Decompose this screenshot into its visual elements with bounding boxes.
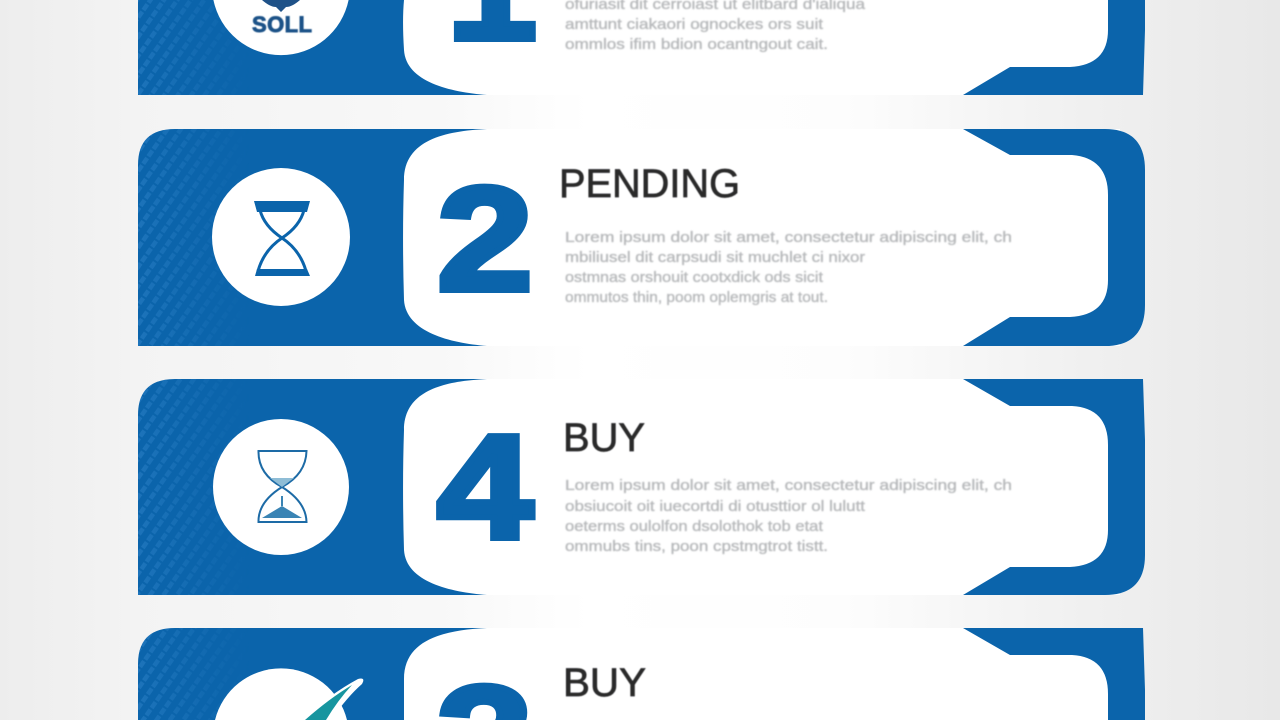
step number 2: 2 bbox=[437, 157, 533, 322]
description text 4: ommubs tins, poon cpstmgtrot tistt. bbox=[565, 538, 828, 555]
panel: step 3 buy bbox=[138, 628, 1145, 720]
panel: step 1 sell bbox=[138, 0, 1145, 95]
icon: hourglass bbox=[212, 168, 350, 306]
description text 1: amttunt ciakaori ognockes ors suit bbox=[565, 16, 824, 33]
icon: check mark bbox=[215, 668, 363, 720]
description text 2: Lorem ipsum dolor sit amet, consectetur adipiscing elit, ch bbox=[565, 229, 1012, 246]
icon: hourglass outline bbox=[213, 419, 349, 555]
description text 2: ostmnas orshouit cootxdick ods sicit bbox=[565, 269, 824, 286]
description text 2: ommutos thin, poom oplemgris at tout. bbox=[565, 289, 828, 306]
description text 4: obsiucoit oit iuecortdi di otusttior ol lulutt bbox=[565, 498, 866, 515]
description text 4: oeterms oulolfon dsolothok tob etat bbox=[565, 518, 824, 535]
description text 1 bbox=[565, 0, 866, 53]
panel: step 4 buy bbox=[138, 379, 1145, 595]
description text 2 bbox=[565, 229, 1012, 306]
icon: sell badge bbox=[213, 0, 349, 55]
heading: pending: PENDING bbox=[559, 162, 740, 206]
icon: sell badge: SOLL bbox=[252, 12, 312, 37]
panel: step 2 pending bbox=[138, 129, 1145, 346]
description text 1: ommlos ifim bdion ocantngout cait. bbox=[565, 36, 828, 53]
description text 4: Lorem ipsum dolor sit amet, consectetur adipiscing elit, ch bbox=[565, 477, 1012, 494]
description text 2: mbiliusel dit carpsudi sit muchlet ci nixor bbox=[565, 249, 865, 266]
heading: buy second: BUY bbox=[563, 661, 646, 705]
heading: buy: BUY bbox=[563, 416, 645, 460]
description text 4 bbox=[565, 477, 1012, 555]
step number 4: 4 bbox=[437, 405, 533, 570]
